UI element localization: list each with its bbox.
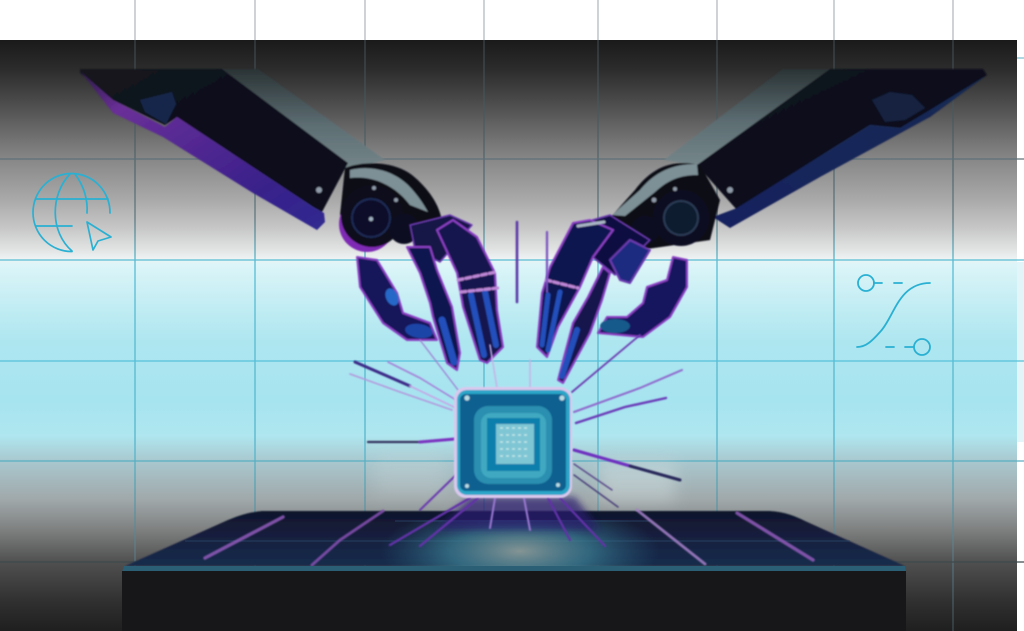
left thumb: [357, 257, 437, 340]
right edge cyan fade: [1017, 262, 1024, 442]
left shoulder shell: [340, 163, 442, 240]
purple glow under chip: [435, 497, 600, 530]
left arm top face: [220, 69, 385, 170]
vertical needles: [516, 222, 518, 302]
right thumb: [598, 257, 687, 337]
robotic hand: right fingers: [537, 215, 687, 383]
right arm navy underside: [713, 75, 987, 228]
right rays: [490, 335, 682, 507]
left rays: [350, 340, 458, 510]
left joint disc: [341, 185, 403, 247]
right joint disc: [653, 190, 709, 246]
right arm dark face: [697, 69, 987, 210]
floor rays: [205, 498, 813, 565]
right finger front: [558, 267, 610, 383]
right arm top face: [664, 69, 832, 165]
table: dark platform: [122, 497, 906, 572]
left wrist: [389, 214, 419, 244]
left joint purple crescent: [339, 196, 395, 252]
right wrist: [631, 216, 659, 244]
table front edge: [122, 566, 906, 572]
right arm bracket: [872, 92, 925, 122]
table base: [122, 571, 906, 631]
icon: S-curve with nodes: [857, 275, 930, 355]
left arm dark face: [80, 69, 348, 212]
chip matrix: [496, 424, 534, 464]
chip die: [487, 418, 540, 471]
robotic arm: right: [608, 69, 987, 250]
table centre glow: [380, 520, 660, 568]
right fingers back: [537, 220, 613, 357]
microchip: [454, 387, 572, 498]
right knuckle highlight: [578, 222, 604, 226]
right short finger: [610, 240, 650, 283]
left arm purple underside: [80, 71, 325, 230]
chip corner screws: [464, 395, 565, 488]
left arm bracket: [140, 92, 176, 124]
right shoulder shell: [608, 163, 720, 250]
robotic arm: left: [80, 69, 442, 252]
robotic hand: left fingers: [357, 215, 503, 370]
chip inner socket: [474, 406, 552, 484]
left palm: [410, 215, 472, 262]
left finger 1: [407, 247, 460, 370]
energy rays around chip: [350, 222, 682, 510]
icon: globe with cursor: [33, 174, 111, 252]
chip glow outline: [454, 387, 572, 498]
light haze near chip: [375, 455, 675, 502]
table top surface: [125, 511, 905, 566]
right palm: [575, 215, 650, 275]
chip body: [457, 390, 570, 495]
table panel lines: [185, 521, 850, 541]
left fingers 2 and 3: [437, 220, 503, 363]
